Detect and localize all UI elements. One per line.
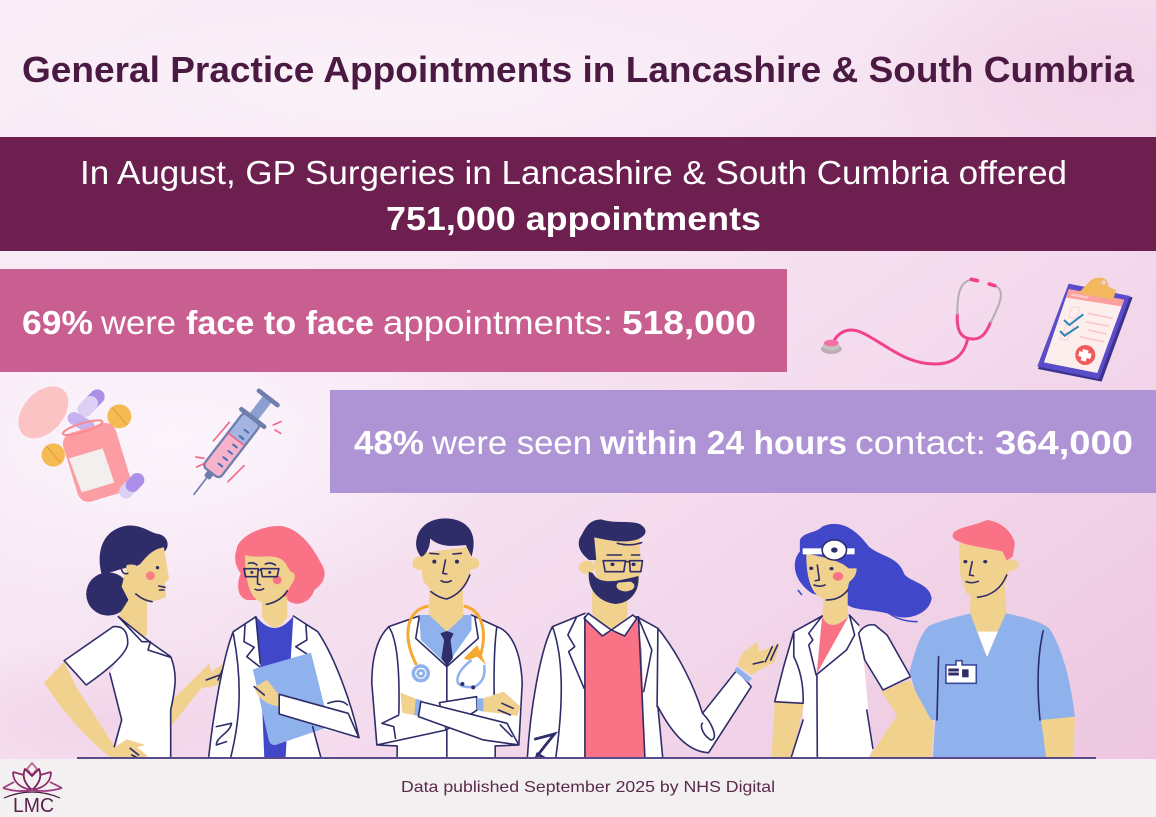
person: doctor with blue hair — [771, 524, 934, 758]
logo: LMC lotus: LMC — [13, 795, 54, 817]
banner text line 2: 751,000 appointments — [386, 200, 761, 237]
footer band — [0, 759, 1156, 817]
panel: within 24 hours — [330, 390, 1156, 493]
panel: face to face: 518,000 — [622, 304, 756, 341]
illustration: group of clinicians — [44, 518, 1075, 758]
panel: face to face: appointments: — [383, 304, 613, 341]
icon: pill bottle — [8, 377, 137, 505]
person: bearded doctor — [527, 519, 780, 758]
panel: within 24 hours: 48% — [354, 424, 424, 461]
ground line — [77, 757, 1096, 759]
panel: face to face: 69% — [22, 304, 93, 341]
panel: face to face — [0, 269, 787, 372]
banner: total appointments — [0, 137, 1156, 251]
panel: within 24 hours: contact: — [855, 424, 986, 461]
panel: within 24 hours: 364,000 — [995, 424, 1133, 461]
title: General Practice Appointments in Lancashire & South Cumbria — [22, 49, 1135, 90]
footer source text: Data published September 2025 by NHS Digital — [401, 779, 775, 796]
person: nurse with dark hair — [44, 525, 228, 758]
panel: face to face: face to face — [186, 304, 374, 341]
icon: syringe — [181, 386, 283, 504]
panel: face to face: were — [100, 304, 176, 341]
panel: within 24 hours: within 24 hours — [599, 424, 847, 461]
icon: stethoscope — [821, 279, 1001, 364]
banner text line 1: In August, GP Surgeries in Lancashire & South Cumbria offered — [80, 154, 1067, 191]
panel: within 24 hours: were seen — [431, 424, 592, 461]
person: doctor with stethoscope — [372, 518, 522, 758]
logo: LMC lotus — [3, 763, 62, 817]
person: nurse in scrubs — [869, 520, 1075, 758]
person: doctor with clipboard — [209, 526, 359, 758]
icon: clipboard — [1037, 278, 1133, 382]
